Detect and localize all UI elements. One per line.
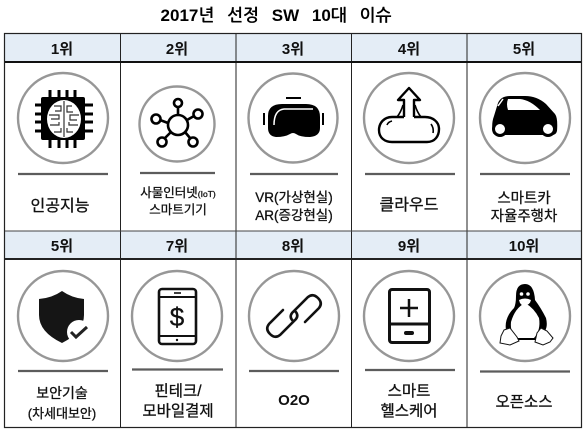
divider line (18, 370, 108, 372)
panel: rank 2 internet of things (140, 86, 216, 217)
label: 사물인터넷(IoT) (140, 186, 216, 200)
divider line (140, 172, 215, 174)
label: 보안기술 (36, 385, 88, 401)
divider line (480, 370, 570, 373)
icon: phone with dollar: $ (170, 302, 185, 332)
panel: rank 3 VR and AR: AR(증강현실) (255, 208, 333, 223)
divider line (132, 368, 223, 371)
rank headers: second row: 7위 (166, 238, 188, 255)
divider line (365, 369, 455, 371)
icon: penguin (500, 284, 553, 345)
panel: rank 3 VR and AR (248, 74, 338, 223)
rank headers: first row: 1위 (51, 41, 73, 58)
rank headers: second row: 5위 (51, 238, 73, 255)
icon: VR headset (264, 98, 323, 137)
rank headers: second row: 8위 (282, 238, 304, 255)
rank headers: first row: 4위 (398, 41, 420, 58)
panel: rank 7 fintech (132, 271, 223, 420)
icon: car (492, 96, 557, 136)
rank headers: first row: 2위 (166, 41, 188, 58)
panel: rank 2 internet of things: 스마트기기 (149, 203, 207, 217)
icon: medical tablet (389, 290, 430, 342)
divider line (250, 173, 338, 175)
divider line (18, 173, 108, 175)
rank headers: first row (51, 41, 535, 58)
label: O2O (278, 392, 310, 409)
panel: rank 9 smart healthcare: 헬스케어 (380, 402, 438, 420)
panel: rank 5 smart car: 자율주행차 (491, 208, 557, 225)
icon: phone with dollar (159, 289, 196, 344)
rank headers: second row: 9위 (398, 238, 420, 255)
rank headers: second row (51, 238, 539, 255)
panel: rank 4 cloud (364, 73, 455, 214)
divider line (249, 370, 339, 372)
icon: cloud upload (379, 88, 439, 142)
title: 2017년 선정 SW 10대 이슈 (161, 6, 391, 25)
icon: shield with check (39, 291, 91, 344)
icon: network hub (152, 99, 202, 146)
icon: chip with brain (35, 90, 93, 148)
panel: rank 1 artificial intelligence (18, 73, 108, 215)
label: VR(가상현실) (255, 190, 333, 205)
label: 스마트 (388, 382, 430, 400)
panel: rank 5 smart car (480, 73, 570, 225)
panel: rank 9 smart healthcare (364, 271, 455, 420)
panel: rank 10 open source (480, 271, 570, 411)
panel: rank 5 security: (차세대보안) (28, 406, 96, 421)
label: 스마트카 (497, 190, 551, 207)
label: 오픈소스 (495, 394, 553, 411)
panel: rank 7 fintech: 모바일결제 (142, 402, 214, 420)
panel: rank 8 O2O (249, 271, 339, 409)
rank headers: second row: 10위 (509, 238, 539, 255)
icon: chain link (267, 295, 321, 337)
divider line (480, 173, 570, 175)
label: 핀테크/ (154, 382, 202, 400)
label: 클라우드 (380, 196, 438, 214)
panel: rank 5 security (18, 271, 108, 421)
rank headers: first row: 5위 (513, 41, 535, 58)
rank headers: first row: 3위 (282, 41, 304, 58)
label: 인공지능 (31, 197, 89, 215)
divider line (365, 173, 455, 175)
